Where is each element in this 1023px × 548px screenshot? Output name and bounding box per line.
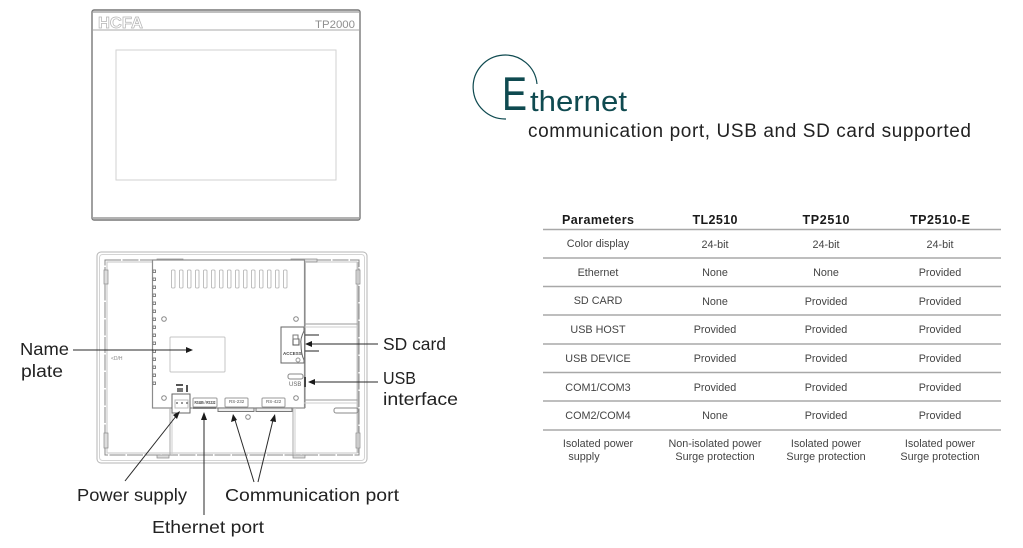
row: USB host: Provided xyxy=(694,324,736,336)
row: SD card: None xyxy=(702,296,728,308)
row: Ethernet: Ethernet xyxy=(578,267,618,279)
row: SD card: SD CARD xyxy=(574,295,622,307)
row: COM1/COM3: Provided xyxy=(694,382,736,394)
row: COM1/COM3: COM1/COM3 xyxy=(565,382,631,394)
RS-422 connector: RS-422 xyxy=(266,399,282,404)
row: COM1/COM3: Provided xyxy=(919,382,961,394)
RS-422 connector xyxy=(256,398,292,412)
RS-232 connector xyxy=(218,398,254,412)
row: isolated power supply: Isolated power xyxy=(905,438,976,450)
subtitle: communication port, USB and SD card supported xyxy=(528,121,971,142)
row: isolated power supply: Isolated power xyxy=(563,438,634,450)
row: COM1/COM3 xyxy=(565,382,961,394)
heading: Ethernet xyxy=(473,55,627,120)
row: SD card: Provided xyxy=(805,296,847,308)
USB port xyxy=(288,374,306,388)
row: COM1/COM3: Provided xyxy=(805,382,847,394)
screw holes xyxy=(162,317,298,419)
row: Ethernet xyxy=(578,267,961,279)
row: isolated power supply xyxy=(563,438,980,463)
row: COM2/COM4: COM2/COM4 xyxy=(565,410,631,422)
row: USB host: Provided xyxy=(919,324,961,336)
callout: USB interface xyxy=(308,368,458,409)
USB port: USB xyxy=(289,382,301,388)
table header row: TP2510-E xyxy=(910,213,970,227)
callout: communication port: Communication port xyxy=(225,485,399,505)
callout: power supply: Power supply xyxy=(77,485,187,505)
row: color display: 24-bit xyxy=(812,239,840,251)
row: USB device: USB DEVICE xyxy=(565,353,631,365)
main board outline xyxy=(152,260,304,408)
row: isolated power supply: Surge protection xyxy=(675,451,755,463)
comparison table xyxy=(543,213,1001,463)
mounting clips xyxy=(104,259,360,458)
SD card slot xyxy=(281,327,319,363)
row: Ethernet: None xyxy=(702,267,728,279)
row: color display xyxy=(567,238,954,251)
model text: TP2000 xyxy=(315,19,355,31)
row: SD card xyxy=(574,295,961,308)
row: isolated power supply: Surge protection xyxy=(786,451,866,463)
row: isolated power supply: Surge protection xyxy=(900,451,980,463)
row: color display: 24-bit xyxy=(701,239,729,251)
row: color display: 24-bit xyxy=(926,239,954,251)
rear view of HMI panel xyxy=(97,252,367,463)
vent slots xyxy=(172,270,287,288)
row: color display: Color display xyxy=(567,238,630,250)
heading large letter E: E xyxy=(502,67,527,120)
row: isolated power supply: Non-isolated power xyxy=(668,438,762,450)
callout: name plate: plate xyxy=(21,361,63,381)
callout: Ethernet port xyxy=(152,412,264,537)
right side bracket lines xyxy=(304,323,358,325)
row: USB device: Provided xyxy=(919,353,961,365)
row: COM2/COM4: Provided xyxy=(919,410,961,422)
callout: power supply xyxy=(77,411,187,505)
row: USB host: USB HOST xyxy=(570,324,626,336)
table header row: Parameters xyxy=(562,213,634,227)
row: COM2/COM4 xyxy=(565,410,961,422)
row: USB host: Provided xyxy=(805,324,847,336)
row: COM2/COM4: None xyxy=(702,410,728,422)
Ethernet connector: RS485 / RS232 xyxy=(194,400,216,405)
row: USB host xyxy=(570,324,961,336)
callout: name plate xyxy=(20,339,193,381)
callout: Ethernet port: Ethernet port xyxy=(152,517,264,537)
callout: communication port xyxy=(225,414,399,505)
callout: SD card: SD card xyxy=(383,334,446,354)
table header row: TP2510 xyxy=(802,213,850,227)
row: USB device: Provided xyxy=(694,353,736,365)
row: Ethernet: Provided xyxy=(919,267,961,279)
RS-232 connector: RS-232 xyxy=(229,399,245,404)
table header row xyxy=(562,213,970,227)
name plate area xyxy=(170,337,225,372)
row: USB device: Provided xyxy=(805,353,847,365)
power connector xyxy=(172,384,190,413)
callout: USB interface: USB xyxy=(383,368,416,388)
table header row: TL2510 xyxy=(692,213,738,227)
brand logo text: HCFA xyxy=(98,15,143,32)
front screen xyxy=(116,50,336,180)
heading circle arc xyxy=(473,55,537,119)
SD card slot: ACCESS xyxy=(283,351,302,356)
row: isolated power supply: Isolated power xyxy=(791,438,862,450)
callout: SD card xyxy=(305,334,446,354)
row: SD card: Provided xyxy=(919,296,961,308)
Ethernet connector xyxy=(193,398,217,408)
row: COM2/COM4: Provided xyxy=(805,410,847,422)
callout: USB interface: interface xyxy=(383,389,458,409)
direction mark: <D/H xyxy=(111,356,123,362)
row: Ethernet: None xyxy=(813,267,839,279)
callout: name plate: Name xyxy=(20,339,69,359)
front view of HMI panel xyxy=(92,10,360,220)
heading text: thernet xyxy=(530,86,627,118)
row: isolated power supply: supply xyxy=(568,451,600,463)
row: USB device xyxy=(565,353,961,365)
left edge pins xyxy=(153,270,156,384)
